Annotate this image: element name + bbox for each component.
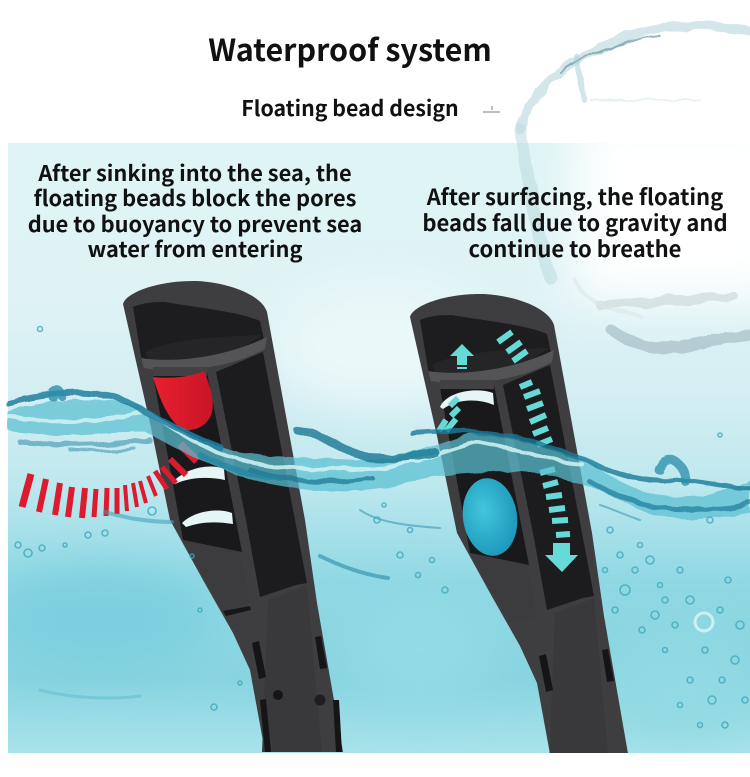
right caption (422, 180, 728, 264)
left caption: due to buoyancy to prevent sea (28, 208, 362, 239)
left caption: After sinking into the sea, the (38, 157, 352, 188)
splash ring top right (520, 25, 750, 347)
small splash mark by subtitle (483, 106, 500, 112)
left snorkel (123, 281, 343, 752)
water wave band (8, 390, 750, 519)
title: Waterproof system (208, 26, 492, 70)
right caption: After surfacing, the floating (427, 180, 723, 212)
left caption: floating beads block the pores (34, 182, 356, 213)
red airflow dashes (22, 444, 197, 518)
vent openings (172, 467, 233, 527)
right caption: beads fall due to gravity and (422, 206, 728, 238)
dark water streaks (40, 505, 640, 698)
left caption (28, 157, 362, 264)
bubbles (15, 326, 748, 728)
red floating bead (153, 371, 213, 430)
background panel (8, 143, 750, 753)
left caption: water from entering (87, 233, 303, 264)
right snorkel (410, 294, 630, 765)
right caption: continue to breathe (469, 232, 681, 264)
airflow arrows (439, 332, 578, 572)
subtitle: Floating bead design (241, 92, 459, 123)
blue floating bead (462, 478, 518, 556)
